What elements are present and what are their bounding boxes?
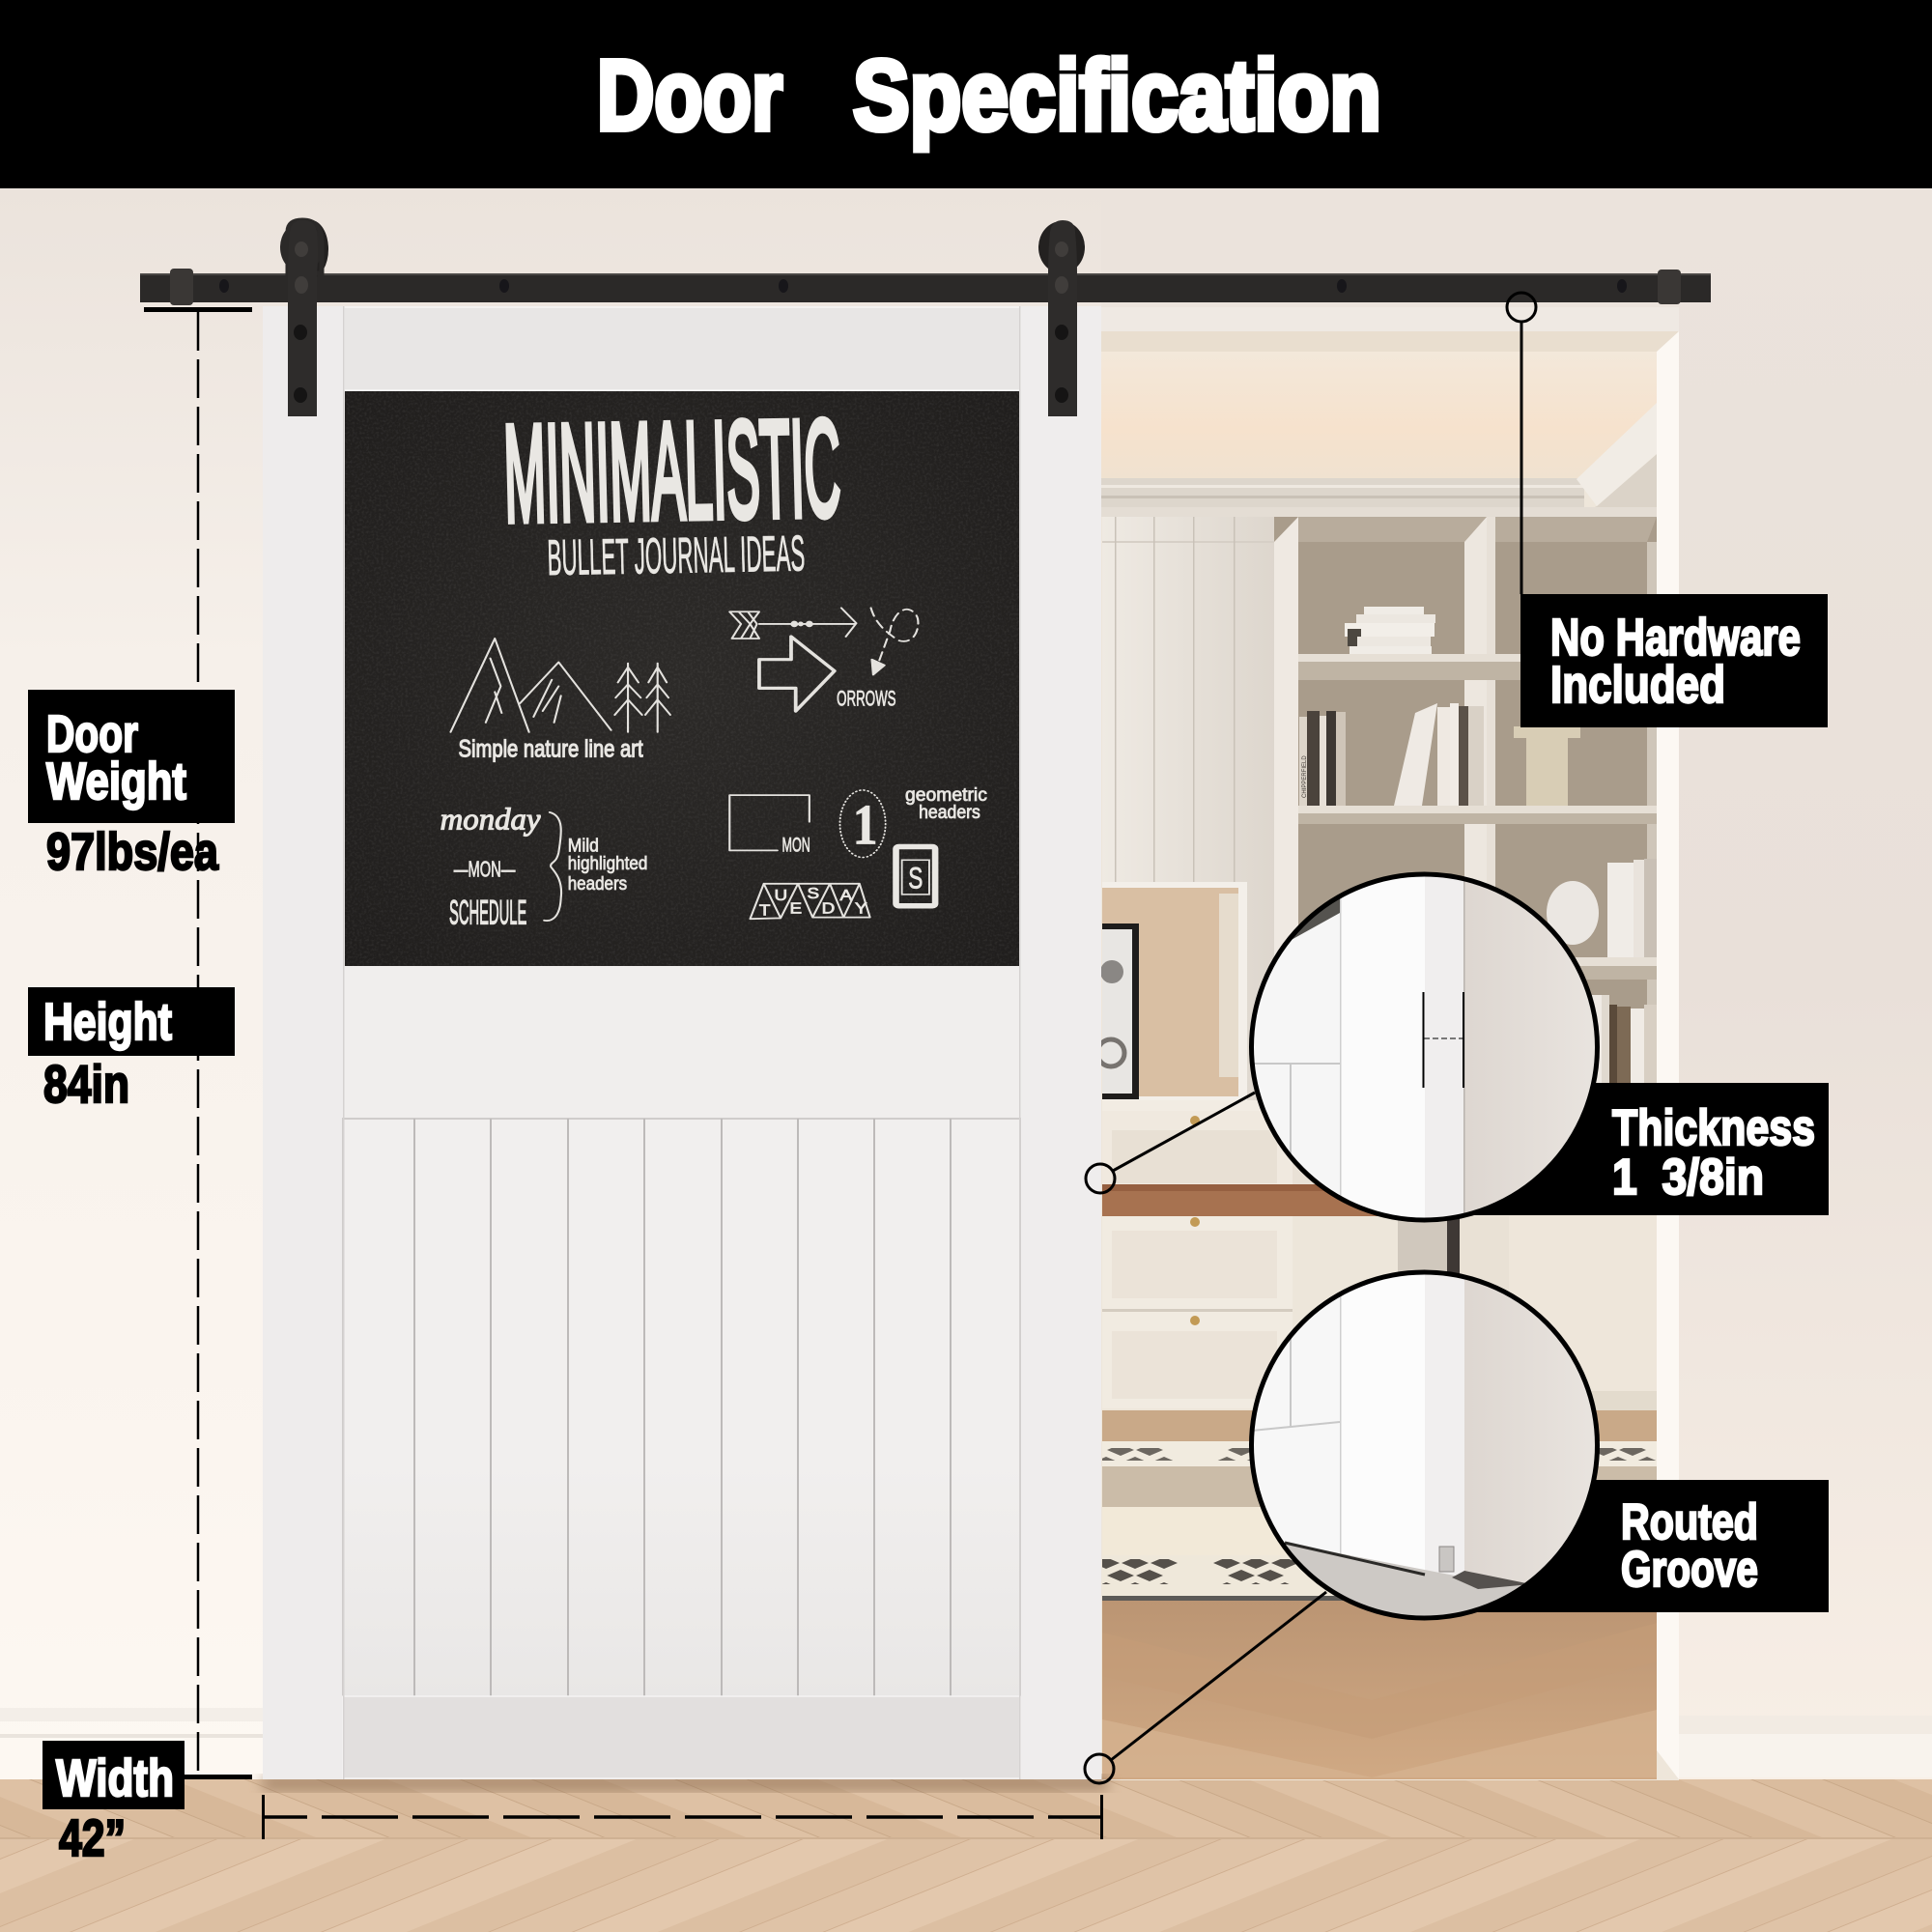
drawing: mountains and trees [450,639,670,732]
callout: door weight [28,690,235,881]
mild highlighted headers note: headers [568,872,627,895]
callout: width [43,1741,185,1867]
magnified detail: door edge thickness [1251,874,1599,1222]
numeral in dotted circle: 1 [853,794,878,857]
caption: nature line art: Simple nature line art [458,736,643,762]
callout: height [28,987,235,1114]
TUESDAY banner: D [822,899,835,917]
callout box: thickness: 1 3/8in [1612,1150,1764,1206]
interior floor and rug [1102,1410,1657,1779]
chalkboard panel: SCHEDULE [449,895,526,932]
wall panelling [1102,517,1276,1116]
numeral in dotted circle [839,790,886,858]
vase [1547,881,1599,945]
caption: arrows: ORROWS [837,687,896,711]
geometric headers note: geometric [905,785,987,806]
schedule text: monday [440,803,541,837]
TUESDAY banner: U [775,886,787,903]
leader: routed groove [1085,1592,1326,1783]
rail bolts [219,279,1627,293]
opening: room interior scene [1097,331,1679,1780]
callout: height: 84in [43,1054,129,1114]
callout: width: Width [56,1749,174,1807]
books row three [1592,859,1657,1083]
rail end stops [170,269,1681,305]
chalkboard panel: BULLET JOURNAL IDEAS [547,526,806,586]
sculpture [1514,726,1580,806]
S badge: S [908,861,923,895]
callout box: thickness: Thickness [1612,1100,1815,1156]
title [597,40,1381,151]
cabinet with drawers and counter [1102,1100,1657,1410]
callout: door weight: Weight [46,753,186,810]
middle rail [344,966,1020,1119]
vertical planks [342,1118,1021,1696]
callout: door weight: 97lbs/ea [46,823,219,881]
title: Specification [853,40,1381,151]
left hanger [280,220,328,416]
drawing: arrows [729,608,918,711]
leader: rail marker [1507,293,1536,594]
bookshelf [1274,517,1657,1106]
TUESDAY banner [751,884,870,919]
callout: height: Height [43,993,172,1051]
wood floor [0,1779,1932,1932]
callout: no hardware [1520,594,1828,727]
mild highlighted headers note [568,834,647,895]
books row two [1299,703,1484,806]
geometric headers note: headers [919,802,980,822]
right hanger [1038,220,1085,416]
magnified detail: routed groove [1251,1272,1599,1623]
thickness marker [1424,992,1463,1088]
stacked books [1345,607,1435,654]
leader: thickness [1086,1093,1255,1193]
geometric headers note [905,785,987,822]
width dimension line [262,1795,1103,1839]
framed artwork [1097,882,1247,1100]
brace [544,812,561,921]
callout: door weight: Door [46,705,138,763]
door shadow on floor [263,1776,1108,1791]
S badge [896,846,935,906]
sliding rail hardware [140,220,1711,416]
MON header: —MON— [454,857,516,882]
barn door [263,306,1101,1779]
TUESDAY banner: E [790,899,802,917]
title: Door [597,40,782,151]
callout: width: 42” [59,1809,126,1867]
height dimension line [144,307,252,1779]
header band [0,0,1932,188]
mild highlighted headers note: highlighted [568,852,647,874]
callout: no hardware: Included [1550,656,1725,714]
TUESDAY banner: Y [855,899,867,917]
geometric box header [729,795,810,856]
TUESDAY banner: T [759,901,771,919]
callout box: routed groove: Groove [1621,1542,1758,1598]
callout: no hardware: No Hardware [1550,609,1801,667]
TUESDAY banner: A [839,886,852,903]
callout box: thickness [1449,1083,1829,1215]
mild highlighted headers note: Mild [568,834,599,856]
callout box: routed groove [1449,1480,1829,1612]
TUESDAY banner: S [807,884,819,901]
chalkboard panel: MON [782,834,810,856]
top rail [344,307,1020,390]
bottom rail [343,1696,1020,1778]
books row two: CHIPPERFIELD [1302,755,1308,798]
door jamb [1657,331,1679,1779]
crown moulding [1101,403,1657,517]
callout box: routed groove: Routed [1621,1494,1758,1550]
text: MINIMALISTIC [502,391,842,551]
chalkboard panel [345,391,1019,966]
